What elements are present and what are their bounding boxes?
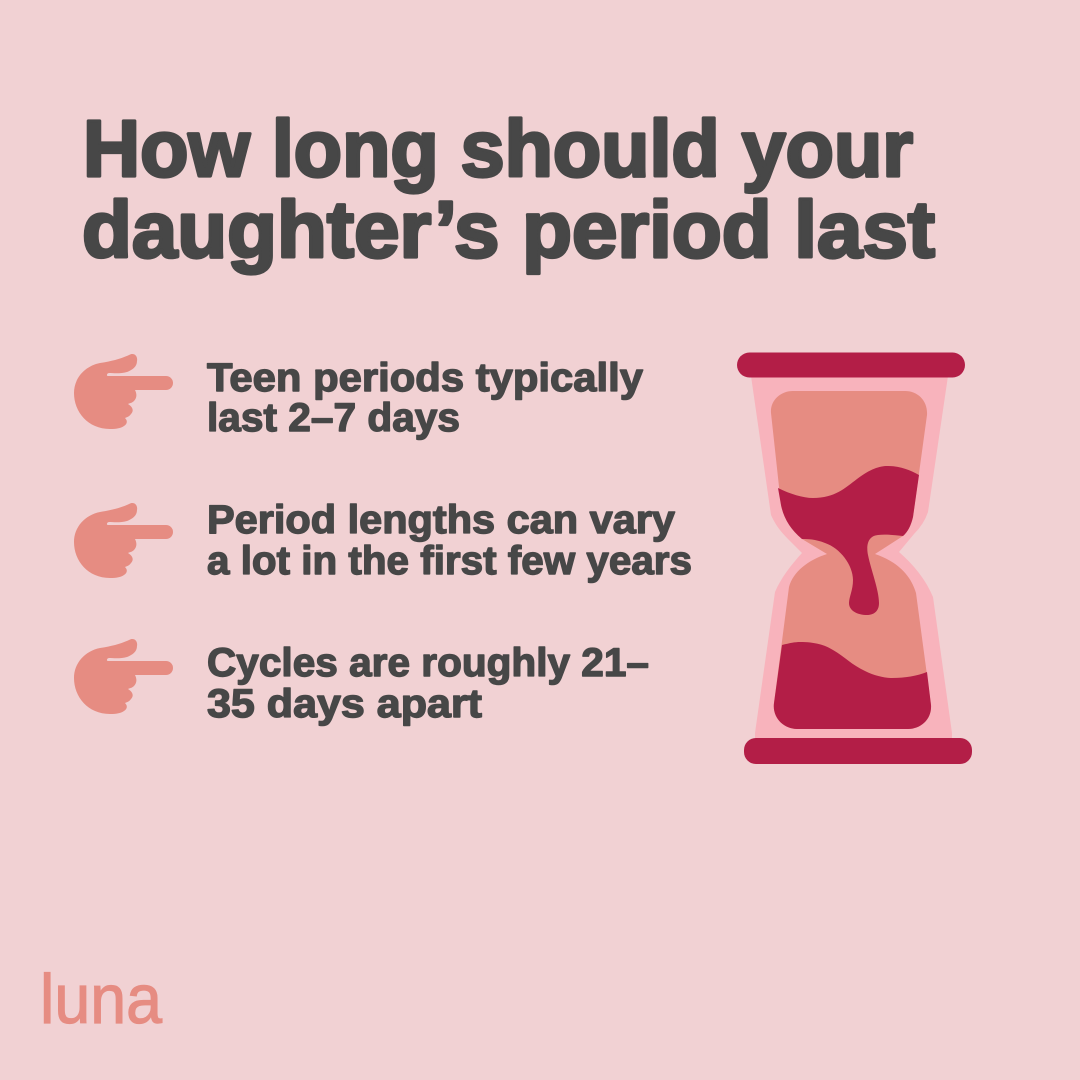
list item: length variation: a lot in the first few years [207, 539, 692, 583]
list item: length variation: Period lengths can vary [207, 498, 676, 542]
title: How long should your [83, 104, 913, 193]
icon: pointing hand [74, 639, 173, 714]
upper liquid and drip [778, 466, 919, 615]
sand chambers [771, 391, 931, 729]
list item: length variation [74, 498, 692, 583]
bottom cap [744, 738, 972, 764]
top cap [737, 352, 965, 378]
list item: teen period length [74, 354, 644, 440]
list item: teen period length: last 2–7 days [207, 396, 460, 440]
icon: pointing hand [74, 503, 173, 578]
icon: pointing hand [74, 354, 173, 429]
title [82, 104, 935, 274]
logo: luna: luna [40, 960, 162, 1038]
title: daughter’s period last [82, 185, 935, 274]
list item: cycle length [74, 639, 649, 726]
list item: cycle length: Cycles are roughly 21– [207, 641, 649, 685]
icon: hourglass [737, 352, 972, 764]
glass outer [751, 376, 952, 740]
list item: teen period length: Teen periods typically [207, 356, 644, 400]
list item: cycle length: 35 days apart [207, 682, 482, 726]
lower liquid [774, 642, 931, 729]
